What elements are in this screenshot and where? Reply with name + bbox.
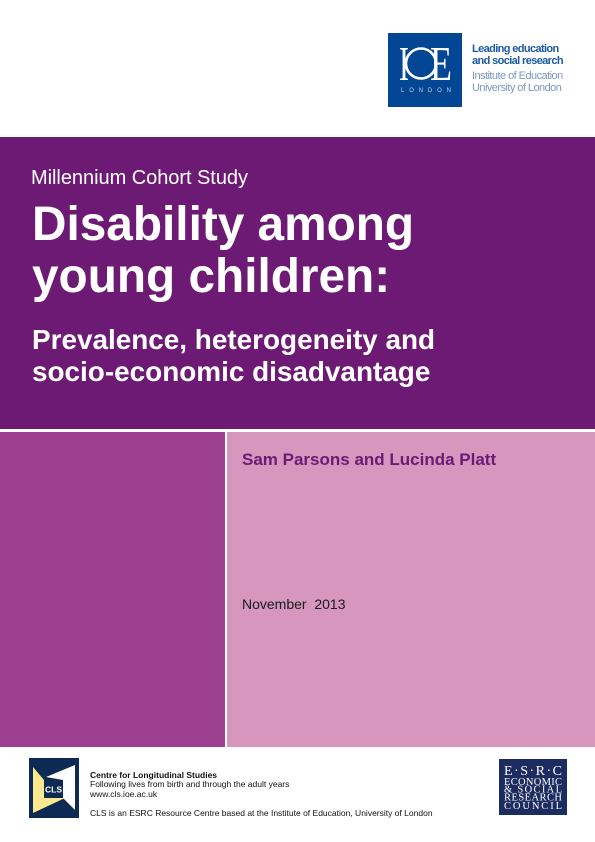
- logo institution name: University of London: [472, 82, 561, 94]
- panel: right pink block: [227, 432, 595, 747]
- logo tagline: [472, 43, 563, 66]
- series name: Millennium Cohort Study: [31, 167, 248, 189]
- logo: CLS: [29, 758, 79, 818]
- logo institution name: [472, 70, 563, 94]
- logo: IOE London: [388, 33, 563, 107]
- centre name: Centre for Longitudinal Studies: [90, 770, 217, 780]
- website: www.cls.ioe.ac.uk: [90, 789, 157, 799]
- centre strapline: Following lives from birth and through the adult years: [90, 779, 289, 789]
- logo tagline: and social research: [472, 54, 563, 66]
- footer text: [90, 770, 433, 818]
- icon: IOE blue square: E: [430, 36, 452, 91]
- main title: [32, 198, 414, 303]
- ESRC statement: CLS is an ESRC Resource Centre based at the Institute of Education, University of London: [90, 808, 433, 818]
- logo: ESRC: & SOCIAL: [504, 784, 562, 796]
- icon: IOE blue square: [388, 33, 462, 107]
- icon: IOE blue square: I: [399, 36, 409, 91]
- main title: Disability among: [32, 198, 414, 251]
- subtitle: socio-economic disadvantage: [32, 356, 430, 387]
- date: November 2013: [242, 596, 346, 612]
- icon: IOE blue square: LONDON: [401, 88, 451, 94]
- subtitle: Prevalence, heterogeneity and: [32, 324, 435, 355]
- authors: Sam Parsons and Lucinda Platt: [242, 450, 496, 469]
- subtitle: [32, 324, 435, 387]
- main title: young children:: [32, 250, 390, 303]
- logo: ESRC: ECONOMIC: [504, 777, 562, 788]
- logo institution name: Institute of Education: [472, 70, 563, 82]
- logo tagline: Leading education: [472, 43, 559, 55]
- panel: left purple block: [0, 432, 225, 747]
- logo: CLS: CLS: [45, 784, 62, 794]
- logo: ESRC: RESEARCH: [504, 792, 562, 804]
- panel: title band: [0, 137, 595, 429]
- logo: ESRC: E·S·R·C: [504, 764, 562, 779]
- logo: ESRC: COUNCIL: [504, 801, 562, 812]
- logo: ESRC: [499, 759, 567, 815]
